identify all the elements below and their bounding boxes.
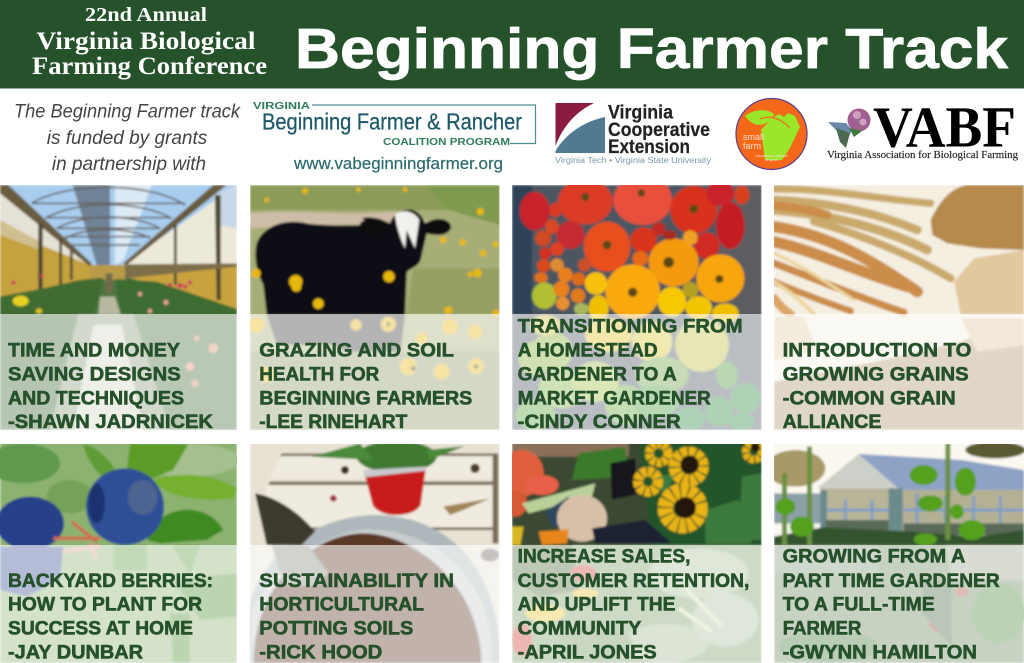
session title: GROWING FROM A	[783, 547, 966, 568]
logo: small farm outreach program: educational outreach	[756, 154, 788, 158]
session title: POTTING SOILS	[259, 619, 413, 640]
panel: transitioning from homestead gardener	[512, 175, 762, 433]
overlay strip	[0, 314, 237, 430]
logo: Virginia Beginning Farmer and Rancher Coalition: Beginning Farmer & Rancher	[262, 108, 522, 134]
photo: farmers market stand with sunflowers	[500, 440, 762, 663]
overlay strip	[250, 545, 500, 663]
icon: clover flower	[828, 108, 870, 148]
session title: GARDENER TO A	[518, 364, 677, 385]
session title: AND TECHNIQUES	[8, 388, 184, 409]
photo: greenhouse interior	[0, 185, 237, 430]
overlay strip	[774, 545, 1024, 663]
session title: CUSTOMER RETENTION,	[518, 571, 749, 592]
panel: growing from part time gardener	[765, 440, 1024, 663]
panel: backyard berries	[0, 440, 240, 663]
session title: TIME AND MONEY	[8, 341, 180, 362]
conference name: Farming Conference	[32, 53, 267, 80]
session title: -COMMON GRAIN	[783, 388, 956, 409]
photo: heirloom tomatoes	[512, 175, 762, 430]
panel: sustainability in potting soils	[248, 440, 500, 663]
photo: cow in sunflower field	[249, 185, 500, 430]
session title: SUCCESS AT HOME	[8, 619, 193, 640]
logo: Virginia Cooperative Extension: Virginia Tech • Virginia State University	[555, 156, 711, 165]
session title: -CINDY CONNER	[518, 412, 681, 433]
logo: Virginia Cooperative Extension: Virginia	[608, 102, 673, 124]
logo: Virginia Cooperative Extension: Extension	[608, 137, 690, 158]
logo: Virginia Beginning Farmer and Rancher Coalition: COALITION PROGRAM	[383, 136, 510, 148]
session title: GROWING GRAINS	[783, 364, 969, 385]
session title: INTRODUCTION TO	[783, 341, 971, 362]
logo: Virginia Cooperative Extension	[555, 102, 711, 165]
session title: COMMUNITY	[518, 619, 642, 640]
session title: AND UPLIFT THE	[518, 594, 675, 616]
logo: small farm outreach program: farm	[743, 141, 761, 151]
session title: HEALTH FOR	[259, 364, 380, 385]
logo: Virginia Beginning Farmer and Rancher Coalition	[253, 100, 536, 173]
session title: -JAY DUNBAR	[8, 642, 143, 663]
overlay strip	[0, 545, 237, 663]
overlay strip	[774, 314, 1024, 430]
session title: -RICK HOOD	[259, 642, 382, 663]
session title: SAVING DESIGNS	[8, 364, 181, 385]
funding statement: The Beginning Farmer track	[14, 102, 241, 122]
session title: HORTICULTURAL	[259, 594, 424, 616]
photo: wheat and grain piles	[774, 185, 1024, 430]
session title: BEGINNING FARMERS	[259, 388, 472, 409]
VABF full name: Virginia Association for Biological Farming	[827, 150, 1018, 161]
funding statement: is funded by grants	[47, 128, 208, 149]
logo: Virginia Beginning Farmer and Rancher Coalition: VIRGINIA	[253, 100, 311, 112]
logo: small farm outreach program	[736, 98, 807, 170]
logo: small farm outreach program: program	[765, 158, 779, 162]
session title: A HOMESTEAD	[518, 341, 658, 362]
overlay strip	[250, 314, 500, 430]
logo: Virginia Cooperative Extension: Cooperative	[608, 120, 710, 141]
panel: time and money saving designs	[0, 185, 237, 433]
session title: -APRIL JONES	[518, 642, 657, 663]
session title: -GWYNN HAMILTON	[783, 642, 977, 663]
logo: small farm outreach program: small	[743, 132, 764, 142]
session title: HOW TO PLANT FOR	[8, 594, 202, 616]
conference name: Virginia Biological	[36, 28, 256, 55]
session title: -LEE RINEHART	[259, 412, 408, 433]
photo: blueberries	[0, 440, 240, 663]
conference name: 22nd Annual	[85, 4, 207, 26]
session title: ALLIANCE	[783, 412, 881, 433]
photo: potted plant and soil bowl	[248, 440, 500, 663]
main title: Beginning Farmer Track	[295, 17, 1008, 81]
panel: increase sales	[500, 440, 762, 663]
session title: FARMER	[783, 619, 862, 640]
session title: PART TIME GARDENER	[783, 571, 1000, 592]
session title: SUSTAINABILITY IN	[259, 571, 454, 592]
header banner	[0, 0, 1024, 88]
panel: introduction to growing grains	[774, 185, 1024, 433]
funding statement: in partnership with	[52, 154, 206, 175]
logo: Virginia Association for Biological Farming	[827, 94, 1018, 161]
session title: GRAZING AND SOIL	[259, 341, 454, 362]
photo: glass greenhouse in garden	[765, 440, 1024, 663]
logo: Virginia Beginning Farmer and Rancher Coalition: www.vabeginningfarmer.org	[293, 155, 503, 173]
session title: -SHAWN JADRNICEK	[8, 412, 213, 433]
session title: INCREASE SALES,	[518, 547, 690, 568]
VABF wordmark: VABF	[873, 94, 1016, 160]
session title: MARKET GARDENER	[518, 388, 711, 409]
session title: TO A FULL-TIME	[783, 594, 935, 616]
overlay strip	[512, 545, 762, 663]
session title: TRANSITIONING FROM	[518, 316, 743, 337]
overlay strip	[512, 314, 762, 430]
panel: grazing and soil health	[249, 185, 500, 433]
session title: BACKYARD BERRIES:	[8, 571, 213, 592]
